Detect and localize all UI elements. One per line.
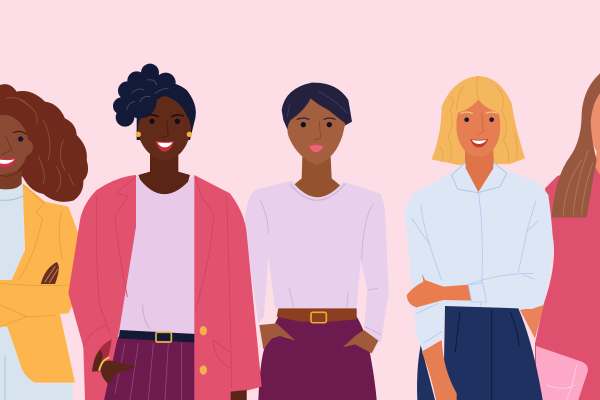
shirt silhouette [405,165,553,352]
nose [314,122,321,140]
earrings [136,132,192,137]
belt [277,308,357,322]
hair highlights [287,92,347,117]
eyes [149,119,180,124]
yellow jacket [0,183,80,383]
crossed arm hand [41,262,59,284]
curly bun [113,64,176,127]
arm [520,305,544,338]
wavy blonde hair [432,76,525,165]
plum trousers [258,317,377,400]
jawline [0,170,21,176]
tee collar line [0,196,23,200]
head hair back [137,82,196,140]
face [287,98,345,165]
face [138,96,191,161]
neck [465,150,494,193]
eyes [464,117,494,122]
figure: blonde woman in light blue shirt [405,76,553,400]
navy belt [119,330,197,343]
face [456,99,500,157]
teeth [157,142,173,147]
teeth [472,140,487,144]
belt buckle [156,332,171,342]
left hand [259,323,295,349]
plum trousers [104,337,197,400]
nose [162,120,168,137]
trouser pinstripes [115,343,182,400]
nose [477,113,483,135]
wrist [92,350,103,372]
gold bracelet [99,358,109,370]
hand [100,361,135,384]
skirt behind arm [417,345,435,400]
figure: woman at far left with curly hair and yellow jacket [0,84,88,400]
neck opening [466,157,493,192]
face [0,115,33,177]
lower tee and trousers [0,323,73,400]
pink jacket left [68,175,136,400]
top seams [260,200,382,335]
curly hair [0,84,88,202]
white tee [0,185,24,287]
dress [535,163,600,400]
figure: woman with short dark hair in lilac top [245,83,389,400]
teeth [0,159,15,164]
jacket lapels and seams [83,177,232,388]
nose [2,137,12,154]
bag fold lines [547,365,577,400]
curl highlights [127,80,168,110]
lilac tee [117,175,197,337]
smile [156,141,174,152]
eyes [301,122,332,127]
belt buckle [311,312,326,323]
jacket lines [0,185,68,327]
figure: woman at far right with long brown hair [520,73,600,400]
short dark hair [282,83,352,147]
forearm and hand [407,273,472,307]
lips [309,145,323,152]
hair strands [563,150,593,215]
eye [18,136,23,142]
jacket buttons [200,326,207,375]
tee fold [143,305,149,328]
right hand [343,330,378,353]
pocket shadow [92,339,112,372]
eyebrows [461,112,497,113]
eyebrows [297,118,335,119]
skirt seams [455,310,519,400]
neck [292,157,342,203]
right hand [231,390,247,400]
shirt seams [412,192,538,343]
trouser seam [3,357,6,400]
figure: woman with dark curly updo and pink jacket [68,64,262,400]
lilac top [245,181,389,343]
folder bag [536,346,588,400]
collar [290,184,345,200]
long hair [552,73,600,217]
pink jacket right [194,175,262,400]
lower arm [422,340,457,400]
shirt collar [452,163,507,193]
neck [138,150,190,195]
eyebrow [13,131,26,134]
smile [0,158,16,167]
finger lines [45,267,58,283]
smile [470,139,488,147]
neck [0,170,22,190]
navy skirt [443,306,543,400]
eyebrows [146,115,183,117]
curls [7,98,73,192]
neck and face [590,93,600,175]
shirt cuff [468,283,487,302]
hair waves [440,77,517,162]
